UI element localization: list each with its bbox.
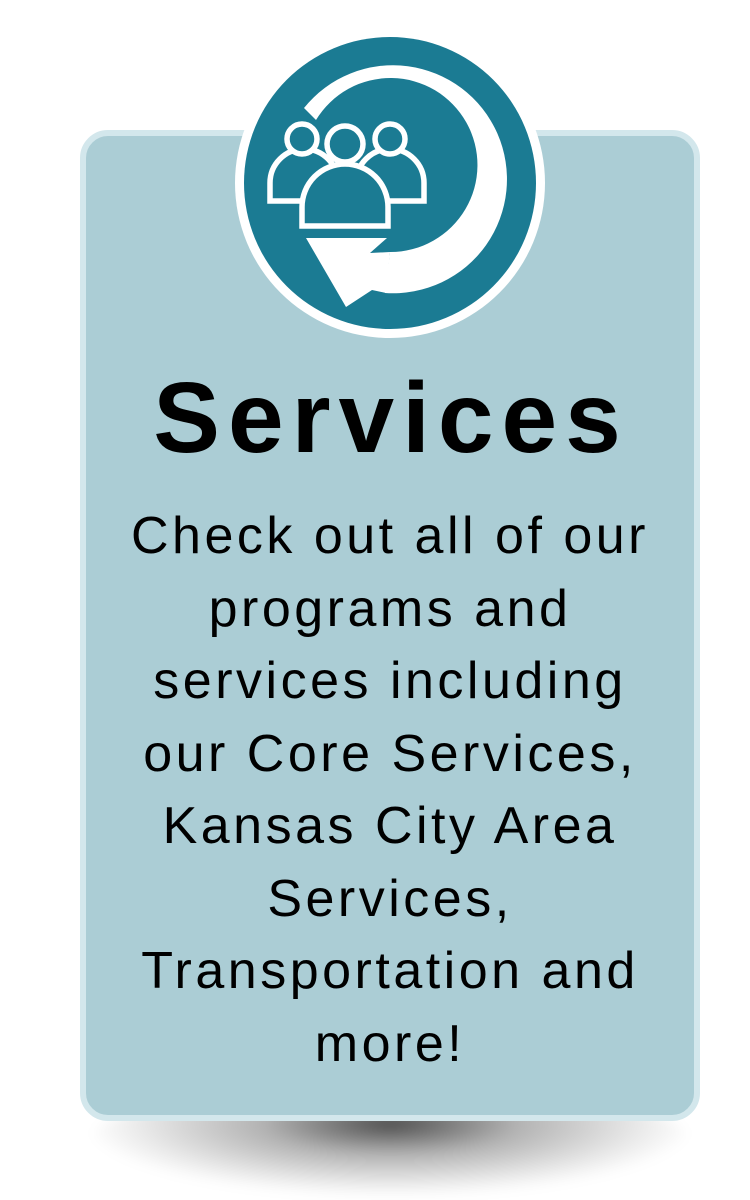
text block: Transportation and	[141, 942, 639, 1000]
icon: circular arrow	[304, 65, 507, 307]
heading: Services	[153, 362, 629, 474]
icon: services circle	[235, 37, 545, 338]
icon: people	[270, 124, 424, 226]
text block: Kansas City Area	[163, 797, 617, 855]
text block: services including	[153, 652, 627, 710]
text block: Services,	[267, 870, 513, 928]
shadow	[90, 1085, 690, 1195]
panel: card	[80, 130, 700, 1121]
text block: programs and	[209, 580, 571, 638]
text block	[131, 507, 649, 1072]
text block: more!	[315, 1014, 465, 1072]
text block: Check out all of our	[131, 507, 649, 565]
text block: our Core Services,	[143, 724, 637, 782]
